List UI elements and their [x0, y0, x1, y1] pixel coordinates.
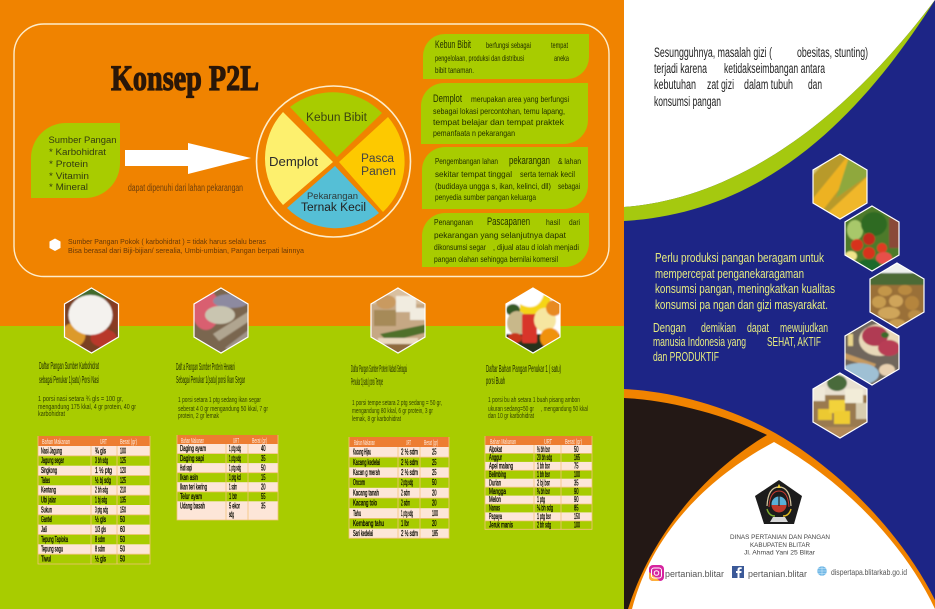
table: protein hewani: Berat (gr) — [252, 436, 267, 445]
card: Demplot: sebagai lokasi percontohan, temu lapang, — [433, 106, 565, 116]
table: buah: 1 bh bsr — [537, 469, 550, 479]
table: karbohidrat: 125 — [120, 475, 126, 485]
table: buah: Apel malang — [489, 461, 513, 471]
card: Kebun Bibit: pengelolaan, produksi dan distribusi — [435, 53, 524, 63]
heading and text: protein nabati: 1 porsi tempe setara 2 ptg sedang = 50 gr, — [352, 400, 442, 407]
table: buah: 100 — [574, 469, 580, 479]
table: karbohidrat: 2 bh sdg — [95, 485, 108, 495]
table: protein hewani: 40 — [261, 443, 266, 453]
table: karbohidrat: 60 — [120, 524, 125, 534]
table: protein nabati: 2 ½ sdm — [401, 467, 418, 477]
text: sehat aktif produktif: SEHAT, AKTIF — [767, 335, 821, 349]
table: karbohidrat: Sukun — [41, 504, 52, 514]
icon: hexagon corn — [812, 153, 868, 220]
text: masalah gizi: konsumsi pangan — [654, 94, 721, 109]
table: protein nabati: 2 ptg sdg — [401, 477, 413, 487]
text: agency address: DINAS PERTANIAN DAN PANGAN — [730, 534, 830, 541]
table: protein hewani: Telur ayam — [180, 491, 202, 501]
icon: hexagon potatoes — [869, 262, 925, 329]
table: karbohidrat: 50 — [120, 544, 125, 554]
table: protein nabati: Oncom — [353, 477, 365, 487]
card: Pekarangan: sebagai — [558, 181, 580, 191]
table: karbohidrat: Tepung sagu — [41, 544, 63, 554]
table: buah: 1 ptg — [537, 494, 545, 504]
panel: sumber pangan leaf: Sumber Pangan — [48, 135, 116, 146]
text: Sebagai Penukar 1(satu) porsi Ikan Segar — [176, 374, 245, 386]
table: protein hewani: 1 btr — [229, 491, 237, 501]
text: website: dispertapa.blitarkab.go.id — [831, 568, 907, 577]
table: buah: 35 — [574, 478, 579, 488]
table: protein nabati: Tahu — [353, 508, 361, 518]
table: buah — [485, 436, 592, 530]
table: protein hewani — [177, 435, 278, 520]
table: karbohidrat: ½ bj sdg — [95, 475, 111, 485]
table: protein nabati: Kacang tanah — [353, 487, 379, 497]
heading and text: protein hewani: 1 porsi setara 1 ptg sedang ikan segar — [178, 397, 261, 404]
table: karbohidrat: Kentang — [41, 485, 56, 495]
title: Konsep P2L — [111, 58, 259, 98]
table: buah: Durian — [489, 478, 501, 488]
text: masalah gizi: Sesungguhnya, masalah gizi ( — [654, 45, 772, 60]
text: produksi pangan beragam — [655, 251, 835, 312]
table: protein nabati: URT — [406, 438, 411, 447]
icon: hexagon fruit — [505, 287, 561, 354]
table: karbohidrat — [38, 436, 150, 564]
table: protein nabati: 50 — [432, 477, 437, 487]
table: karbohidrat: 8 sdm — [95, 544, 105, 554]
text: masalah gizi: dan — [808, 77, 822, 92]
icon: hexagon fish — [193, 287, 249, 354]
card: Demplot: Demplot — [433, 93, 462, 105]
card: Demplot: pemanfaata n pekarangan — [433, 128, 515, 138]
table: buah: 2 bj bsr — [537, 478, 550, 488]
table: protein nabati: Kacan g merah — [353, 467, 380, 477]
icon: globe — [817, 566, 827, 576]
heading and text: karbohidrat: Daftar Pangan Sumber Karbohidrat — [39, 360, 99, 372]
card: Kebun Bibit: tempat — [551, 40, 568, 50]
table: protein nabati: 2 sdm — [401, 498, 410, 508]
table: protein hewani: 15 — [261, 472, 266, 482]
table: karbohidrat: Singkong — [41, 465, 57, 475]
table: protein nabati: 25 — [432, 457, 437, 467]
card: Kebun Bibit — [423, 34, 589, 79]
table: karbohidrat: 50 — [120, 514, 125, 524]
table: protein nabati: Sari kedelai — [353, 528, 373, 538]
label: Pasca Panen: Pasca — [361, 153, 395, 165]
table: karbohidrat: Bahan Makanan — [42, 437, 70, 446]
table: karbohidrat: 210 — [120, 485, 126, 495]
icon: logo Kabupaten Blitar — [755, 480, 802, 524]
heading and text: buah: Daftar Bahan Pangan Penukar 1 ( satu) — [486, 363, 561, 375]
card: Pascapanen: , dijual atau d iolah menjadi — [493, 242, 579, 252]
table: protein nabati: 25 — [432, 447, 437, 457]
text: agency address: KABUPATEN BLITAR — [750, 542, 810, 549]
text: masalah gizi: kebutuhan — [654, 77, 696, 92]
icon: facebook — [732, 566, 744, 578]
diagram: P2L circle — [256, 86, 410, 237]
heading and text: protein nabati: mengandung 80 kkal, 6 gr protein, 3 gr — [352, 408, 433, 415]
table: protein nabati: 1 ptg sdg — [401, 508, 413, 518]
table: protein nabati: 185 — [432, 528, 438, 538]
table: buah: 1 bh bsr — [537, 461, 550, 471]
table: protein nabati: Kacang tolo — [353, 498, 377, 508]
table: buah: Melon — [489, 494, 501, 504]
table: protein nabati: 20 — [432, 487, 437, 497]
card: Kebun Bibit: Kebun Bibit — [435, 39, 471, 51]
card: Pascapanen: Penanganan — [434, 217, 473, 227]
card: Demplot: tempat belajar dan tempat praktek — [433, 117, 565, 127]
table: karbohidrat: 8 sdm — [95, 534, 105, 544]
table: buah: 90 — [574, 494, 579, 504]
table: karbohidrat: Nasi Jagung — [41, 445, 62, 455]
text: produksi pangan beragam: mempercepat penganekaragaman — [655, 267, 804, 281]
label: Pasca Panen: Panen — [361, 166, 396, 178]
background: orange upper left — [0, 0, 624, 326]
icon: hexagon tofu and beans — [370, 287, 426, 354]
card: Pekarangan: penyedia sumber pangan keluarga — [435, 192, 536, 202]
background: green lower left — [0, 326, 624, 609]
table: protein nabati: 1 lbr — [401, 518, 409, 528]
heading and text: buah: ukuran sedang=50 gr — [488, 406, 534, 413]
table: buah: ¾ bh bsr — [537, 486, 550, 496]
table: karbohidrat: 120 — [120, 465, 126, 475]
table: protein hewani: 55 — [261, 491, 266, 501]
heading and text: karbohidrat: 1 porsi nasi setara ¾ gls = 100 gr, — [38, 396, 123, 403]
table: buah: ¼ bh sdg — [537, 503, 553, 513]
heading and text: buah: porsi Buah — [486, 375, 505, 387]
card: Pascapanen: hasil — [546, 217, 560, 227]
table: buah: 2 bh sdg — [537, 520, 551, 530]
text: produksi pangan beragam: konsumsi pangan, meningkatkan kualitas — [655, 282, 835, 296]
table: karbohidrat: 1 ½ ptg — [95, 465, 112, 475]
table: protein hewani: Udang basah — [180, 500, 205, 510]
note: sumber pangan pokok — [50, 237, 305, 255]
table: protein hewani: sdg — [229, 509, 234, 519]
panel: sumber pangan leaf: * Mineral — [49, 182, 88, 193]
text: Daftar Pangan Sumber Protein Nabati Sebagai — [351, 363, 407, 375]
text: masalah gizi: ketidakseimbangan antara — [724, 61, 825, 76]
note: sumber pangan pokok: Bisa berasal dari Biji-bijian/ serealia, Umbi-umbian, Pangan berpati lainnya — [68, 246, 305, 255]
card: Kebun Bibit: berfungsi sebagai — [486, 40, 531, 50]
card: Kebun Bibit: aneka — [554, 53, 569, 63]
table: protein hewani: 20 — [261, 481, 266, 491]
heading and text: buah — [486, 363, 588, 420]
note: sumber pangan pokok: Sumber Pangan Pokok ( karbohidrat ) = tidak harus selalu beras — [68, 237, 266, 246]
table: protein hewani: 1 ptg kcl — [229, 472, 241, 482]
text: produksi pangan beragam: Perlu produksi pangan beragam untuk — [655, 251, 825, 265]
card: Pekarangan: serta ternak kecil — [520, 169, 575, 179]
panel: right column background — [624, 0, 935, 609]
text: sehat aktif produktif — [653, 321, 828, 364]
table: karbohidrat: 50 — [120, 534, 125, 544]
table: buah: Bahan Makanan — [490, 437, 516, 446]
table: protein nabati — [349, 437, 449, 538]
card: Pekarangan: & lahan — [558, 156, 581, 166]
table: protein hewani: 1 ptg sdg — [229, 453, 241, 463]
table: buah: 100 — [574, 520, 580, 530]
table: karbohidrat: Tiwul — [41, 554, 51, 564]
table: buah: 1 ptg bsr — [537, 511, 551, 521]
heading and text: protein hewani: seberat 4 0 gr mengandung 50 kkal, 7 gr — [178, 406, 268, 413]
table: protein hewani: Daging sapi — [180, 453, 204, 463]
panel: Konsep P2L outline — [14, 24, 609, 276]
text: instagram handle: pertanian.blitar — [665, 569, 724, 579]
table: protein nabati: Kacang Hijau — [353, 447, 371, 457]
card: Pascapanen: pangan olahan sehingga bernilai komersil — [434, 254, 558, 264]
table: protein hewani: URT — [233, 436, 239, 445]
panel: sumber pangan leaf: * Vitamin — [49, 171, 89, 182]
icon: instagram — [649, 565, 664, 581]
table: protein hewani: 5 ekor — [229, 500, 240, 510]
table: protein nabati: Kacang kedelai — [353, 457, 380, 467]
text: masalah gizi: dalam tubuh — [744, 77, 793, 92]
icon: hexagon meat — [844, 319, 900, 386]
heading and text: protein hewani — [176, 361, 268, 420]
heading and text: buah: 1 porsi bu ah setara 1 buah pisang ambon — [488, 397, 580, 404]
card: Demplot: merupakan area yang berfungsi — [471, 94, 569, 104]
table: karbohidrat: Tepung Tapioka — [41, 534, 68, 544]
card: Pascapanen: Pascapanen — [487, 216, 530, 228]
table: karbohidrat: Ubi jalar — [41, 494, 56, 504]
icon: hexagon yellow tofu — [812, 372, 868, 439]
table: buah: Alpokat — [489, 444, 502, 454]
table: karbohidrat: ¾ gls — [95, 445, 106, 455]
table: protein nabati: 2 sdm — [401, 487, 410, 497]
heading and text: protein hewani: Daft a Pangan Sumber Protein Hewani — [176, 361, 235, 373]
table: buah: 150 — [574, 511, 580, 521]
table: buah: Anggur — [489, 452, 502, 462]
text: facebook handle: pertanian.blitar — [748, 569, 807, 579]
table: buah: Belimbing — [489, 469, 506, 479]
table: karbohidrat: Jali — [41, 524, 47, 534]
table: buah: URT — [544, 437, 552, 446]
text: sehat aktif produktif: Dengan — [653, 321, 686, 335]
table: protein nabati: Berat (gr) — [424, 438, 438, 447]
table: karbohidrat: ½ gls — [95, 514, 106, 524]
label: Pekarangan Ternak Kecil: Pekarangan — [307, 191, 358, 202]
card: Pascapanen: dikonsumsi segar — [434, 242, 486, 252]
heading and text: karbohidrat: mengandung 175 kkal, 4 gr protein, 40 gr — [38, 404, 137, 411]
card: Pekarangan — [422, 147, 588, 209]
table: protein hewani: 35 — [261, 500, 266, 510]
table: protein hewani: Ikan teri kering — [180, 481, 207, 491]
heading and text: protein hewani: protein, 2 gr lemak — [178, 413, 219, 420]
table: protein hewani: 35 — [261, 453, 266, 463]
label: Kebun Bibit: Kebun Bibit — [306, 112, 368, 124]
card: Pekarangan: pekarangan — [509, 155, 550, 167]
table: buah: 85 — [574, 503, 579, 513]
text: sehat aktif produktif: dapat — [747, 321, 769, 335]
card: Pascapanen: dari — [569, 217, 580, 227]
panel: sumber pangan leaf: * Protein — [49, 159, 88, 170]
table: karbohidrat: URT — [100, 437, 107, 446]
card: Pekarangan: Pengembangan lahan — [435, 156, 498, 166]
label: Pekarangan Ternak Kecil — [301, 191, 366, 214]
table: protein nabati: 25 — [432, 467, 437, 477]
heading and text: karbohidrat: sebagai Penukar 1(satu) Porsi Nasi — [39, 374, 99, 386]
card: Pascapanen — [422, 213, 589, 267]
text: sehat aktif produktif: mewujudkan — [780, 321, 828, 335]
table: karbohidrat: 150 — [120, 504, 126, 514]
text: masalah gizi: obesitas, stunting) — [797, 45, 868, 60]
text: agency address — [730, 534, 830, 556]
table: karbohidrat: Talas — [41, 475, 50, 485]
heading and text: protein nabati: Penukar 1(satu) porsi Tempe — [351, 376, 383, 388]
table: protein nabati: 2 ½ sdm — [401, 447, 418, 457]
text: masalah gizi: zat gizi — [707, 77, 734, 92]
table: karbohidrat: 125 — [120, 455, 126, 465]
icon: hexagon vegetables — [844, 205, 900, 272]
table: karbohidrat: 3 bh sdg — [95, 455, 108, 465]
table: karbohidrat: 3 ptg sdg — [95, 504, 108, 514]
heading and text: protein nabati — [351, 363, 442, 423]
text: produksi pangan beragam: konsumsi pa ngan dan gizi masyarakat. — [655, 298, 828, 312]
table: protein nabati: Kembang tahu — [353, 518, 384, 528]
heading and text: buah: dan 10 gr karbohidrat — [488, 413, 534, 420]
text: sehat aktif produktif: manusia Indonesia yang — [653, 335, 746, 349]
text: sehat aktif produktif: dan PRODUKTIF — [653, 350, 719, 364]
table: buah: Papaya — [489, 511, 502, 521]
text: sehat aktif produktif: demikian — [701, 321, 736, 335]
table: karbohidrat: 135 — [120, 494, 126, 504]
table: protein hewani: 1 ptg sdg — [229, 462, 241, 472]
table: karbohidrat: Jagung segar — [41, 455, 64, 465]
card: Pekarangan: (budidaya ungga s, ikan, kelinci, dll) — [435, 181, 551, 191]
label: Demplot: Demplot — [269, 155, 319, 169]
card: Kebun Bibit: bibit tanaman. — [435, 65, 474, 75]
text: agency address: Jl. Ahmad Yani 25 Blitar — [744, 550, 816, 556]
heading and text: karbohidrat: karbohidrat — [38, 411, 65, 418]
heading and text: karbohidrat — [38, 360, 137, 418]
arrow — [125, 143, 251, 174]
table: buah: Jeruk manis — [489, 520, 513, 530]
table: karbohidrat: Berat (gr) — [120, 437, 137, 446]
label: Pekarangan Ternak Kecil: Ternak Kecil — [301, 202, 366, 214]
card: Pekarangan: sekitar tempat tinggal — [435, 169, 512, 179]
text: masalah gizi — [654, 45, 868, 109]
table: buah: 50 — [574, 444, 579, 454]
text: masalah gizi: terjadi karena — [654, 61, 707, 76]
table: protein hewani: Daging ayam — [180, 443, 206, 453]
table: buah: 90 — [574, 486, 579, 496]
caption under arrow: dapat dipenuhi dari lahan pekarangan — [128, 183, 243, 194]
table: protein hewani: Ikan asin — [180, 472, 198, 482]
table: protein nabati: 20 — [432, 518, 437, 528]
panel: sumber pangan leaf — [31, 123, 120, 198]
table: protein hewani: 50 — [261, 462, 266, 472]
table: protein nabati: 2 ½ sdm — [401, 457, 418, 467]
table: protein hewani: Hati sapi — [180, 462, 192, 472]
card: Pascapanen: pekarangan yang selanjutnya dapat — [434, 230, 567, 240]
table: karbohidrat: Gantel — [41, 514, 52, 524]
icon: hexagon rice — [64, 287, 120, 354]
card: Demplot — [421, 83, 588, 144]
table: protein nabati: 2 ½ sdm — [401, 528, 418, 538]
table: protein nabati: Bahan Makanan — [354, 438, 375, 447]
table: buah: 75 — [574, 461, 579, 471]
table: karbohidrat: 1/3 gls — [95, 524, 106, 534]
table: buah: 165 — [574, 452, 580, 462]
table: protein nabati: 20 — [432, 498, 437, 508]
label: Pasca Panen — [361, 153, 396, 178]
panel: sumber pangan leaf: * Karbohidrat — [49, 147, 106, 158]
table: buah: Mangga — [489, 486, 506, 496]
table: buah: Nanas — [489, 503, 500, 513]
table: buah: 20 bh sdg — [537, 452, 552, 462]
table: karbohidrat: ½ gls — [95, 554, 106, 564]
table: karbohidrat: 50 — [120, 554, 125, 564]
table: protein hewani: Bahan Makanan — [181, 436, 204, 445]
table: karbohidrat: 1 bj sdg — [95, 494, 107, 504]
table: protein hewani: 1 ptg sdg — [229, 443, 241, 453]
table: buah: ½ bh bsr — [537, 444, 550, 454]
table: protein hewani: 1 sdm — [229, 481, 237, 491]
table: buah: Berat (gr) — [565, 437, 582, 446]
heading and text: protein nabati: lemak, 8 gr karbohidrat — [352, 416, 401, 423]
table: protein nabati: 100 — [432, 508, 438, 518]
heading and text: buah: , mengandung 50 kkal — [541, 406, 588, 413]
table: karbohidrat: 100 — [120, 445, 126, 455]
